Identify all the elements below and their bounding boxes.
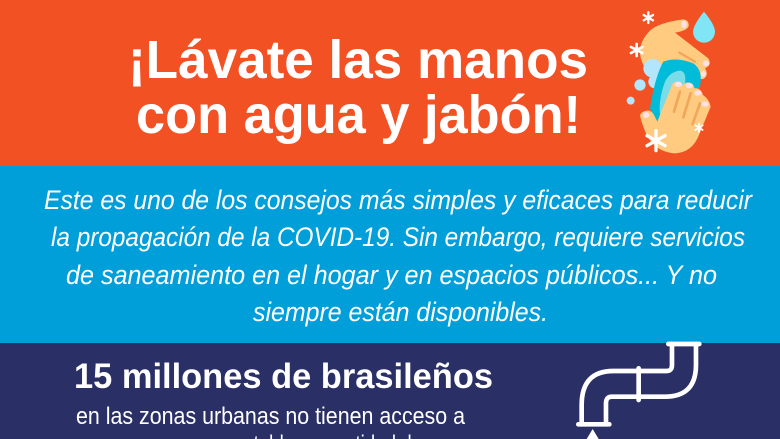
text block: urban access: en las zonas urbanas no tienen acceso a [76, 403, 466, 430]
icon: water pipe [578, 344, 699, 439]
text block: introduction [44, 185, 753, 327]
title [128, 30, 588, 145]
title: ¡Lávate las manos [128, 30, 588, 90]
text block: urban access [76, 403, 466, 439]
panel: statistics [0, 343, 780, 439]
icon: hands washing with soap [627, 12, 715, 153]
heading: 15 millones: 15 millones de brasileños [74, 357, 493, 396]
text block: introduction: de saneamiento en el hogar y en espacios públicos... Y no [66, 260, 717, 290]
panel: title banner [0, 0, 780, 166]
panel: introduction [0, 166, 780, 343]
title: con agua y jabón! [136, 85, 581, 145]
text block: introduction: siempre están disponibles. [253, 297, 548, 327]
